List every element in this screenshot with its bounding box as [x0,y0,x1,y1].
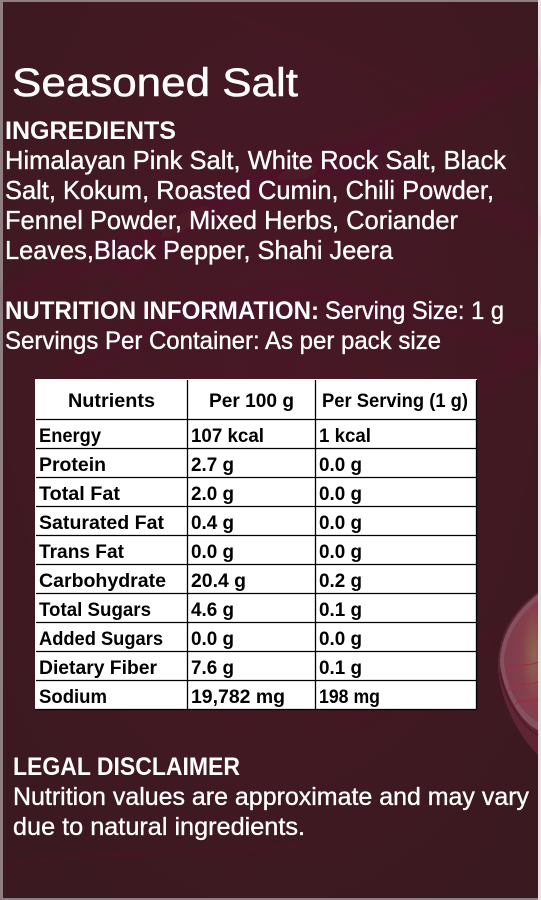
row: trans fat: Trans Fat [39,542,125,563]
ingredients list: Leaves,Black Pepper, Shahi Jeera [5,235,394,265]
row: dietary fiber [39,658,362,679]
table header: Per 100 g [209,391,294,412]
row: dietary fiber: 7.6 g [191,658,234,679]
row: trans fat [39,542,362,563]
row: protein: Protein [39,455,106,476]
row: saturated fat [39,513,362,534]
nutrition information text: NUTRITION INFORMATION: [5,297,319,325]
row: sodium: 198 mg [319,687,380,708]
row: total fat: 2.0 g [191,484,234,505]
bowl image at right edge [498,592,538,755]
row: energy [39,426,371,447]
ingredients list: Himalayan Pink Salt, White Rock Salt, Black [5,145,507,175]
row: saturated fat: 0.0 g [319,513,362,534]
nutrition information text: Serving Size: 1 g [325,297,504,325]
row: sodium: Sodium [39,687,107,708]
row: carbohydrate: 0.2 g [319,571,362,592]
row: trans fat: 0.0 g [191,542,234,563]
row: dietary fiber: 0.1 g [319,658,362,679]
row: added sugars: Added Sugars [39,629,163,650]
row: added sugars [39,629,362,650]
row: added sugars: 0.0 g [319,629,362,650]
table header [68,391,468,412]
ingredients list: Fennel Powder, Mixed Herbs, Coriander [5,205,458,235]
row: energy: 107 kcal [191,426,264,447]
row: carbohydrate: Carbohydrate [39,571,166,592]
row: added sugars: 0.0 g [191,629,234,650]
row: total sugars: Total Sugars [39,600,151,621]
table header: Per Serving (1 g) [322,391,468,412]
row: energy: 1 kcal [319,426,371,447]
row: carbohydrate [39,571,362,592]
row: energy: Energy [39,426,101,447]
row: sodium: 19,782 mg [191,687,285,708]
row: total fat [39,484,362,505]
title: Seasoned Salt [12,61,298,105]
row: total sugars: 0.1 g [319,600,362,621]
row: saturated fat: Saturated Fat [39,513,165,534]
row: sodium [39,687,380,708]
row: total sugars [39,600,362,621]
legal disclaimer: due to natural ingredients. [13,813,305,841]
nutrition information text: Servings Per Container: As per pack size [5,327,441,355]
nutrition information text [5,297,504,355]
ingredients list [5,145,507,265]
row: total sugars: 4.6 g [191,600,234,621]
row: protein: 0.0 g [319,455,362,476]
row: total fat: Total Fat [39,484,121,505]
nutrition table [35,379,477,710]
row: carbohydrate: 20.4 g [191,571,246,592]
ingredients section [5,117,507,265]
ingredients heading: INGREDIENTS [5,117,176,145]
ingredients list: Salt, Kokum, Roasted Cumin, Chili Powder, [5,175,494,205]
table header: Nutrients [68,391,155,412]
row: total fat: 0.0 g [319,484,362,505]
legal disclaimer [13,753,529,841]
legal disclaimer: LEGAL DISCLAIMER [13,753,240,781]
row: protein: 2.7 g [191,455,234,476]
row: dietary fiber: Dietary Fiber [39,658,158,679]
row: saturated fat: 0.4 g [191,513,234,534]
legal disclaimer: Nutrition values are approximate and may vary [13,783,529,811]
row: protein [39,455,362,476]
row: trans fat: 0.0 g [319,542,362,563]
